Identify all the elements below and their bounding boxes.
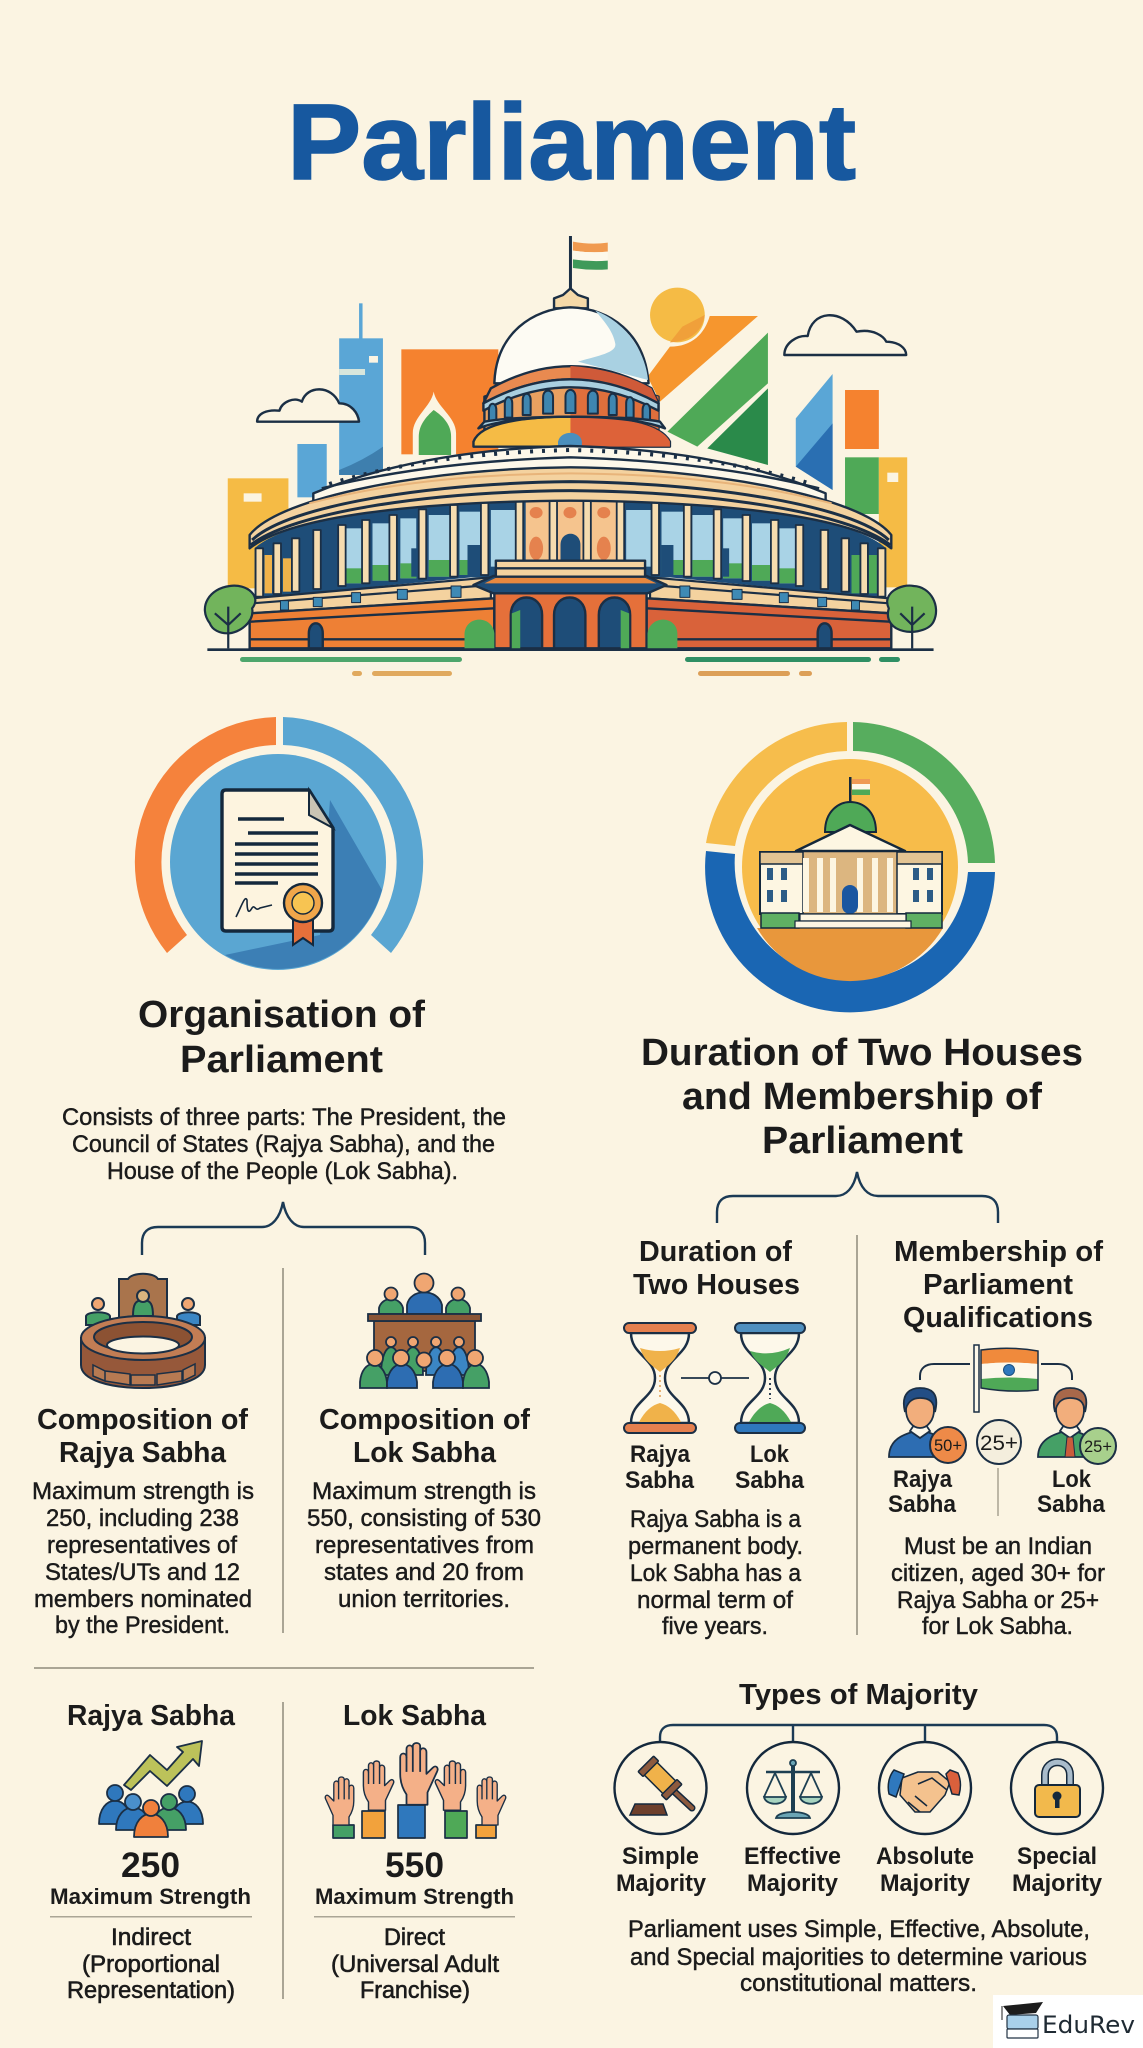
membership labels: Lok	[1052, 1466, 1092, 1493]
duration text: Rajya Sabha is a	[630, 1506, 802, 1533]
composition of lok sabha: Maximum strength is	[312, 1478, 536, 1505]
bracket	[142, 1202, 425, 1255]
stat: lok sabha 550: Franchise)	[360, 1977, 470, 2004]
panel: organisation of parliament	[32, 994, 541, 1639]
icon: padlock	[1011, 1742, 1103, 1834]
icon: rising arrow over people	[99, 1741, 203, 1837]
membership labels	[888, 1466, 1106, 1518]
composition of rajya sabha: Rajya Sabha	[59, 1437, 227, 1469]
composition of rajya sabha: by the President.	[55, 1612, 230, 1639]
clouds	[257, 315, 906, 422]
membership text: Must be an Indian	[904, 1533, 1092, 1560]
illustration: Parliament building with skyline	[205, 236, 936, 651]
title: Parliament	[287, 81, 856, 202]
hourglass labels	[625, 1441, 805, 1494]
bracket	[717, 1172, 998, 1223]
badge: 50+	[930, 1427, 966, 1463]
description: Consists of three parts: The President, the	[62, 1104, 506, 1131]
icon: lok sabha chamber	[360, 1274, 489, 1388]
hourglass labels: Sabha	[735, 1467, 805, 1494]
colonnade lawn strip	[346, 560, 796, 583]
membership heading: Qualifications	[903, 1302, 1093, 1334]
majority description: and Special majorities to determine various	[630, 1944, 1087, 1971]
heading: Organisation of	[138, 994, 425, 1036]
central panel	[526, 501, 618, 561]
stat: rajya sabha 250: 250	[121, 1846, 180, 1885]
membership heading: Membership of	[894, 1236, 1103, 1268]
base walls	[250, 598, 891, 648]
membership text: citizen, aged 30+ for	[891, 1560, 1105, 1587]
lok sabha heading: Lok Sabha	[343, 1700, 487, 1732]
duration text: normal term of	[637, 1587, 793, 1614]
majority labels	[616, 1843, 1103, 1897]
heading: Parliament	[762, 1120, 963, 1162]
majority labels: Majority	[616, 1870, 707, 1897]
composition of rajya sabha: Composition of	[37, 1404, 248, 1436]
stat: lok sabha 550: Maximum Strength	[315, 1884, 514, 1909]
entablature	[250, 467, 891, 548]
badge: 25+ centre: 25+	[980, 1432, 1018, 1455]
composition of rajya sabha: 250, including 238	[46, 1505, 239, 1532]
majority labels: Majority	[1012, 1870, 1103, 1897]
duration text	[628, 1506, 803, 1640]
divider	[282, 1702, 284, 1999]
composition of lok sabha: union territories.	[338, 1586, 510, 1613]
majority description	[628, 1916, 1090, 1997]
icon: scales	[747, 1742, 839, 1834]
duration text: permanent body.	[628, 1533, 803, 1560]
duration text: Lok Sabha has a	[630, 1560, 802, 1587]
logo: EduRev	[993, 1995, 1143, 2048]
panel: types of majority	[614, 1679, 1103, 1997]
stat: rajya sabha 250: Representation)	[67, 1977, 235, 2004]
stat: rajya sabha 250: (Proportional	[82, 1951, 220, 1978]
skyline blocks	[228, 288, 907, 588]
connector between hourglasses	[681, 1372, 749, 1384]
icon: rajya sabha hourglass	[624, 1323, 696, 1433]
icon: lok sabha hourglass	[735, 1323, 805, 1433]
composition of lok sabha: representatives from	[315, 1532, 534, 1559]
description: House of the People (Lok Sabha).	[107, 1158, 458, 1185]
membership labels: Sabha	[1037, 1491, 1106, 1518]
stat: rajya sabha 250: Maximum Strength	[50, 1884, 251, 1909]
icon: gavel	[614, 1742, 706, 1834]
description	[62, 1104, 506, 1185]
hourglass labels: Lok	[750, 1441, 790, 1468]
bushes	[465, 620, 677, 648]
duration heading	[633, 1236, 800, 1301]
majority labels: Special	[1017, 1843, 1097, 1870]
lower band	[250, 577, 891, 613]
duration heading: Two Houses	[633, 1269, 800, 1301]
columns	[256, 501, 885, 597]
description: Council of States (Rajya Sabha), and the	[72, 1131, 495, 1158]
connector tree	[660, 1725, 1057, 1742]
divider	[282, 1268, 284, 1633]
icon: government building in tricolour ring	[705, 722, 995, 1012]
composition of rajya sabha: States/UTs and 12	[45, 1559, 240, 1586]
heading: Duration of Two Houses	[641, 1032, 1083, 1074]
flag	[569, 236, 608, 289]
roof band	[313, 446, 826, 503]
heading: Parliament	[180, 1039, 383, 1081]
dome base ring	[473, 417, 670, 450]
majority description: Parliament uses Simple, Effective, Absolute,	[628, 1916, 1090, 1943]
majority labels: Majority	[880, 1870, 971, 1897]
heading: and Membership of	[682, 1076, 1042, 1118]
membership heading: Parliament	[923, 1269, 1073, 1301]
composition of lok sabha: Composition of	[319, 1404, 530, 1436]
drum windows	[489, 390, 650, 422]
majority labels: Effective	[744, 1843, 841, 1870]
logo: EduRev: EduRev	[1042, 2011, 1135, 2039]
composition of lok sabha: states and 20 from	[324, 1559, 524, 1586]
icon: qualifications flag and persons	[889, 1345, 1116, 1464]
composition of rajya sabha: representatives of	[47, 1532, 237, 1559]
composition of rajya sabha: Maximum strength is	[32, 1478, 254, 1505]
colonnade dark silhouettes	[411, 545, 729, 577]
panel: strength comparison	[50, 1700, 515, 2004]
colonnade backing	[255, 501, 886, 598]
stat: lok sabha 550: 550	[385, 1846, 444, 1885]
heading	[641, 1032, 1083, 1162]
badge: 25+ right	[1080, 1428, 1116, 1464]
ground dashes under building	[240, 657, 900, 676]
majority labels: Absolute	[876, 1843, 974, 1870]
icon: handshake	[879, 1742, 971, 1834]
composition of lok sabha: 550, consisting of 530	[307, 1505, 541, 1532]
membership text	[891, 1533, 1105, 1640]
icon: raised hands	[325, 1743, 506, 1838]
composition of rajya sabha: members nominated	[34, 1586, 252, 1613]
icon: rajya sabha chamber	[81, 1274, 205, 1388]
membership text: for Lok Sabha.	[922, 1613, 1073, 1640]
person: lok sabha	[1038, 1388, 1098, 1457]
membership labels: Rajya	[893, 1466, 953, 1493]
panel: duration and membership	[624, 1032, 1116, 1640]
rajya sabha heading: Rajya Sabha	[67, 1700, 236, 1732]
badge: 50+: 50+	[934, 1436, 962, 1455]
heading: Types of Majority	[739, 1679, 978, 1711]
composition of rajya sabha	[32, 1404, 254, 1639]
heading	[138, 994, 425, 1081]
hourglass labels: Sabha	[625, 1467, 695, 1494]
membership text: Rajya Sabha or 25+	[897, 1587, 1099, 1614]
stat: lok sabha 550	[314, 1846, 515, 2004]
membership labels: Sabha	[888, 1491, 957, 1518]
majority description: constitutional matters.	[740, 1970, 977, 1997]
stat: lok sabha 550: Direct	[384, 1924, 445, 1951]
hourglass labels: Rajya	[630, 1441, 691, 1468]
badge: 25+ centre	[977, 1420, 1021, 1464]
majority labels: Simple	[622, 1843, 699, 1870]
composition of lok sabha: Lok Sabha	[353, 1437, 497, 1469]
membership heading	[894, 1236, 1103, 1334]
portico	[473, 561, 666, 648]
dome	[483, 288, 658, 430]
stat: rajya sabha 250: Indirect	[111, 1924, 191, 1951]
trees	[205, 586, 936, 648]
badge: 25+ right: 25+	[1084, 1437, 1112, 1456]
duration heading: Duration of	[639, 1236, 792, 1268]
stat: rajya sabha 250	[50, 1846, 252, 2004]
composition of lok sabha	[307, 1404, 541, 1613]
icon: document in blue ring	[135, 717, 423, 970]
divider	[856, 1235, 858, 1635]
colonnade window panels	[265, 510, 877, 593]
ground line	[207, 648, 934, 651]
majority labels: Majority	[747, 1870, 839, 1897]
stat: lok sabha 550: (Universal Adult	[331, 1951, 499, 1978]
person: rajya sabha	[889, 1388, 948, 1457]
duration text: five years.	[662, 1613, 768, 1640]
